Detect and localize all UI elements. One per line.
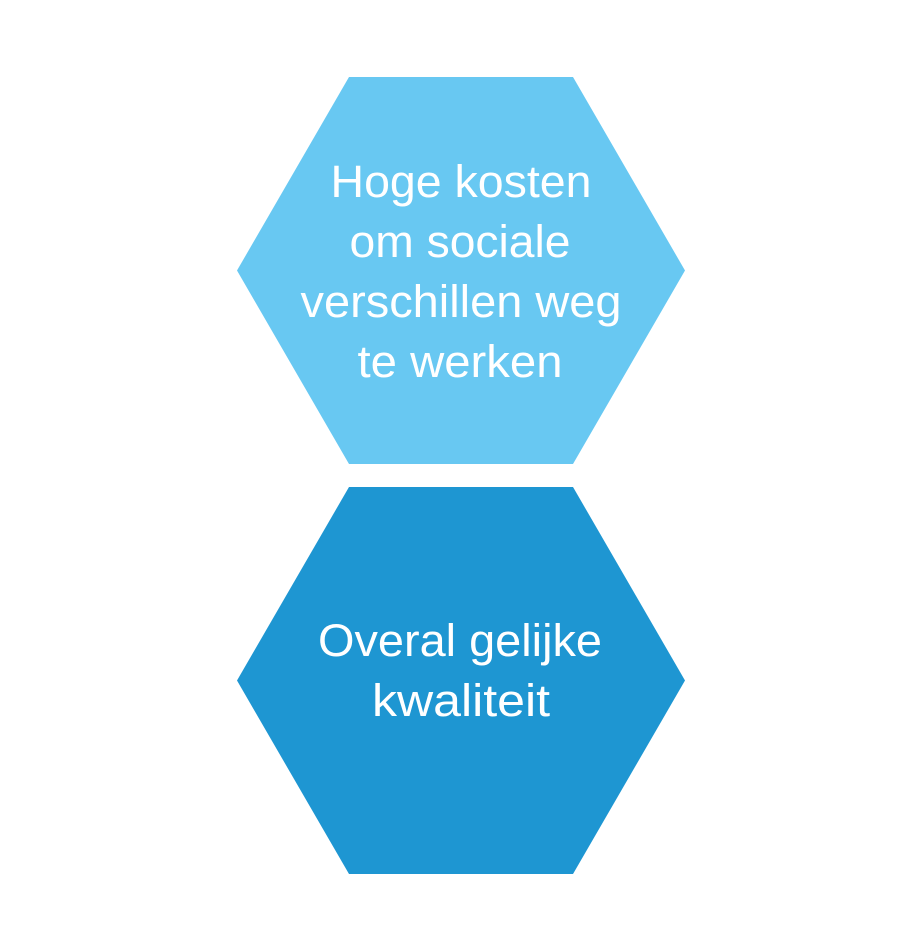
text: equal quality bbox=[318, 615, 602, 726]
hexagon shape: light blue bbox=[237, 77, 685, 464]
text: equal quality: Overal gelijke bbox=[318, 615, 602, 666]
text: high costs: verschillen weg bbox=[300, 276, 622, 327]
text: high costs: te werken bbox=[358, 336, 562, 387]
panel: hexagon equal quality bbox=[237, 487, 685, 874]
panel: hexagon high costs bbox=[237, 77, 685, 464]
text: equal quality: kwaliteit bbox=[372, 675, 551, 726]
text: high costs: Hoge kosten bbox=[330, 156, 592, 207]
hexagon shape: dark blue bbox=[237, 487, 685, 874]
text: high costs bbox=[300, 156, 622, 387]
text: high costs: om sociale bbox=[350, 216, 570, 267]
